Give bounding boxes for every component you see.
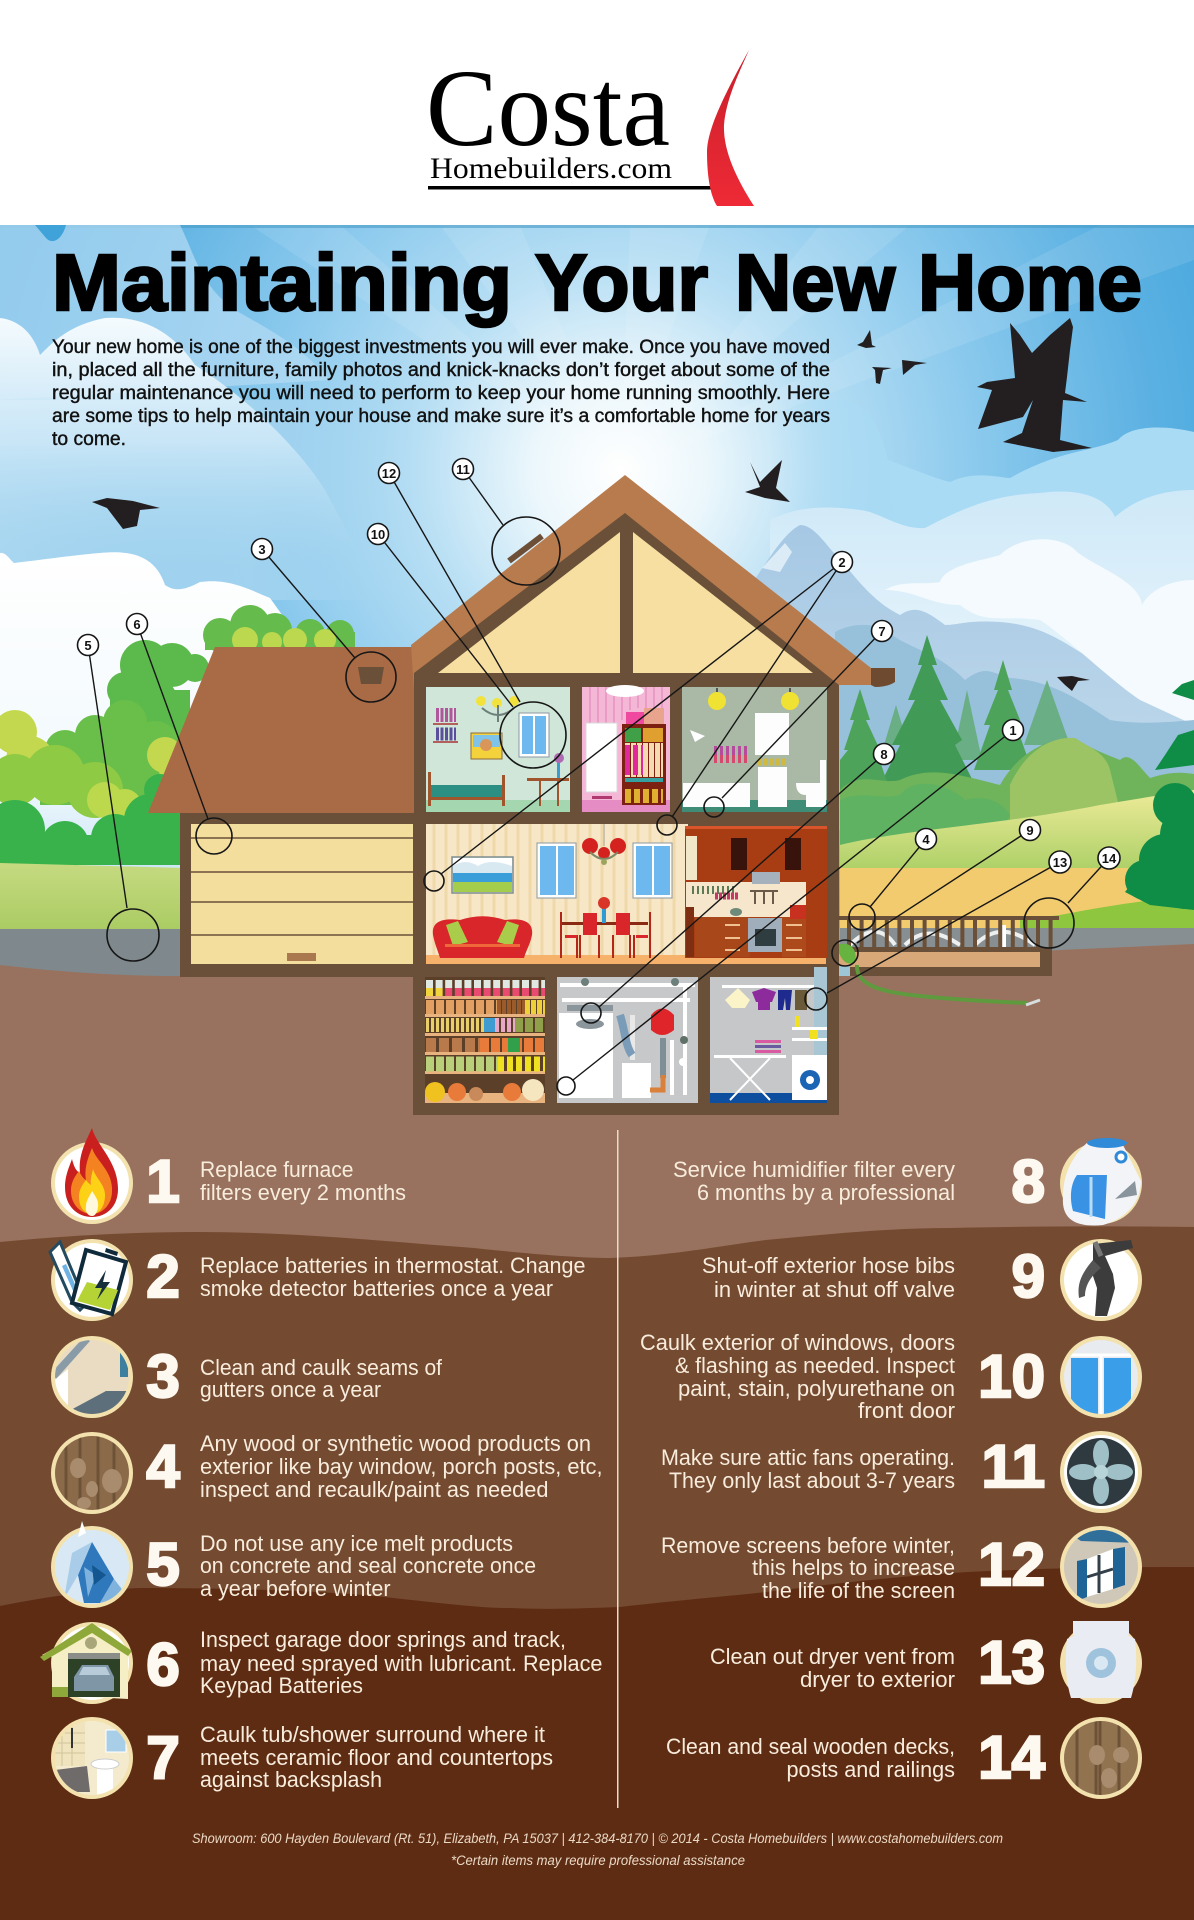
intro paragraph: are some tips to help maintain your house and make sure it’s a comfortable home for years <box>52 406 830 427</box>
house: attic <box>438 532 813 673</box>
callout number badges: 13 <box>1053 855 1067 870</box>
left column tips: on concrete and seal concrete once <box>200 1553 536 1578</box>
sky background <box>0 225 1194 985</box>
soil: middle layer <box>0 1226 1194 1920</box>
right conifer trees <box>840 635 1070 790</box>
right column tips: They only last about 3-7 years <box>669 1468 955 1493</box>
logo: Costa Homebuilders: Costa <box>426 47 670 169</box>
right column tips: dryer to exterior <box>800 1667 955 1692</box>
deck and railing <box>839 916 1059 976</box>
left column tips <box>200 1157 602 1792</box>
item 14: icon wood deck <box>1060 1717 1142 1799</box>
garden hose <box>837 944 1040 1005</box>
item numbers right: 12 <box>978 1531 1045 1598</box>
callout number badges: 9 <box>1026 823 1034 838</box>
right column tips: Clean and seal wooden decks, <box>666 1734 955 1759</box>
item numbers left: 7 <box>146 1724 180 1791</box>
gutter <box>871 668 895 687</box>
item numbers left: 3 <box>146 1343 180 1410</box>
left column tips: filters every 2 months <box>200 1180 406 1205</box>
right column tips: front door <box>858 1398 955 1423</box>
bird: right sky <box>1057 676 1090 691</box>
right column tips: the life of the screen <box>762 1578 955 1603</box>
item numbers left: 5 <box>146 1531 180 1598</box>
item numbers right <box>978 1148 1046 1791</box>
right column tips: Make sure attic fans operating. <box>661 1445 955 1470</box>
left column tips: gutters once a year <box>200 1377 381 1402</box>
title: Home <box>918 238 1142 327</box>
item 7: icon bathroom <box>51 1717 133 1799</box>
left column tips: smoke detector batteries once a year <box>200 1276 553 1301</box>
right road <box>840 928 1194 954</box>
right column tips: paint, stain, polyurethane on <box>678 1376 955 1401</box>
soil: lower layer <box>0 1567 1194 1920</box>
attic fan <box>509 536 542 561</box>
left column tips: Clean and caulk seams of <box>200 1355 443 1380</box>
footer contact and disclaimer: Showroom: 600 Hayden Boulevard (Rt. 51), Elizabeth, PA 15037 | 412-384-8170 | © 2014 - Costa Homebuilders | www.costahomebuilders.com <box>192 1831 1003 1846</box>
callout number badges: 2 <box>838 555 846 570</box>
intro paragraph: Your new home is one of the biggest investments you will ever make. Once you have moved <box>52 337 830 358</box>
item numbers right: 14 <box>978 1724 1046 1791</box>
roof vent <box>358 667 384 684</box>
room: utility / furnace <box>557 977 698 1103</box>
footer contact and disclaimer: *Certain items may require professional assistance <box>451 1853 745 1868</box>
left trees <box>0 640 209 869</box>
intro paragraph: to come. <box>52 429 126 450</box>
bird: left sky <box>92 498 160 529</box>
item 5: icon ice <box>51 1521 133 1608</box>
right tree <box>1125 680 1194 910</box>
item 13: icon dryer <box>1060 1621 1142 1704</box>
left column tips: a year before winter <box>200 1576 390 1601</box>
room: bathroom <box>682 687 827 812</box>
intro paragraph <box>52 337 830 450</box>
item 10: icon window <box>1060 1336 1142 1418</box>
left column tips: Replace batteries in thermostat. Change <box>200 1253 586 1278</box>
callout number badges: 11 <box>456 462 470 477</box>
item 11: icon attic fan <box>1060 1431 1142 1513</box>
callout number badges: 3 <box>258 542 266 557</box>
left column tips: Replace furnace <box>200 1157 354 1182</box>
room: laundry <box>710 967 827 1103</box>
item 12: icon window with shutters <box>1060 1526 1142 1608</box>
callout number badges: 7 <box>878 624 886 639</box>
callout number badges: 8 <box>880 747 888 762</box>
intro paragraph: in, placed all the furniture, family photos and knick-knacks don’t forget about some of the <box>52 360 830 381</box>
left column tips: Caulk tub/shower surround where it <box>200 1722 545 1747</box>
left column tips: may need sprayed with lubricant. Replace <box>200 1651 602 1676</box>
right column tips: posts and railings <box>786 1757 955 1782</box>
callout target circles <box>107 517 1074 1095</box>
title: Your <box>535 238 708 327</box>
logo: Costa Homebuilders <box>426 47 754 206</box>
item 8: icon humidifier <box>1060 1138 1142 1225</box>
item numbers right: 11 <box>982 1433 1045 1500</box>
callout number badges: 1 <box>1009 723 1017 738</box>
right column tips: Remove screens before winter, <box>661 1533 955 1558</box>
left column tips: inspect and recaulk/paint as needed <box>200 1477 548 1502</box>
right column tips: Service humidifier filter every <box>673 1157 955 1182</box>
room: pantry <box>425 977 545 1103</box>
item 2: icon thermostat and battery <box>50 1239 133 1321</box>
bird: above roof <box>745 460 790 502</box>
small birds at top right <box>857 330 927 384</box>
left column tips: exterior like bay window, porch posts, etc, <box>200 1454 602 1479</box>
room: bedroom <box>426 687 570 812</box>
right column tips: Caulk exterior of windows, doors <box>640 1330 955 1355</box>
title <box>52 238 1142 327</box>
callout number badges: 4 <box>922 832 930 847</box>
house: main roof <box>411 475 871 690</box>
callout number badges: 14 <box>1102 851 1117 866</box>
item numbers left <box>146 1148 180 1791</box>
left grass <box>0 863 185 935</box>
intro paragraph: regular maintenance you will need to perform to keep your home running smoothly. Here <box>52 383 830 404</box>
left column tips: Inspect garage door springs and track, <box>200 1627 566 1652</box>
room: living and dining <box>426 824 826 964</box>
item numbers left: 4 <box>146 1433 180 1500</box>
item numbers right: 9 <box>1012 1243 1045 1310</box>
callout leader lines <box>88 469 1109 1080</box>
house: structural frame <box>180 513 839 1115</box>
title: New <box>735 238 896 327</box>
mountains <box>740 525 1194 830</box>
house: garage roof <box>148 647 420 813</box>
soil: upper layer <box>0 944 1194 1920</box>
item 9: icon hose nozzle <box>1060 1239 1142 1321</box>
left column tips: Any wood or synthetic wood products on <box>200 1431 591 1456</box>
item 6: icon garage <box>40 1622 133 1704</box>
item numbers left: 1 <box>146 1148 180 1215</box>
garage door <box>191 824 413 964</box>
item numbers left: 6 <box>146 1631 180 1698</box>
right column tips: & flashing as needed. Inspect <box>675 1353 955 1378</box>
front cloud <box>885 539 1194 725</box>
right column tips: 6 months by a professional <box>697 1180 955 1205</box>
large birds <box>977 318 1092 452</box>
right column tips: Clean out dryer vent from <box>710 1644 955 1669</box>
callout number badges: 12 <box>382 466 396 481</box>
right column tips: this helps to increase <box>752 1555 955 1580</box>
right column tips: in winter at shut off valve <box>714 1277 955 1302</box>
clouds <box>0 225 1194 900</box>
title: Maintaining <box>52 238 512 327</box>
room: kitchen <box>685 826 827 958</box>
item numbers left: 2 <box>146 1243 180 1310</box>
callout number badges: 10 <box>371 527 385 542</box>
right bushes and hills <box>840 738 1194 930</box>
right column tips <box>640 1157 955 1782</box>
callout number badges: 5 <box>84 638 92 653</box>
callout number badges <box>78 458 1120 873</box>
right column tips: Shut-off exterior hose bibs <box>702 1253 955 1278</box>
item 4: icon wood with water drops <box>51 1432 133 1514</box>
left column tips: meets ceramic floor and countertops <box>200 1745 553 1770</box>
callout number badges: 6 <box>133 617 141 632</box>
left column tips: Do not use any ice melt products <box>200 1531 513 1556</box>
distant ridge <box>835 625 1194 830</box>
item numbers right: 10 <box>978 1343 1045 1410</box>
room: closet <box>582 685 670 812</box>
item numbers right: 8 <box>1012 1148 1045 1215</box>
footer contact and disclaimer <box>192 1831 1003 1868</box>
item numbers right: 13 <box>978 1629 1045 1696</box>
left column tips: against backsplash <box>200 1767 382 1792</box>
item 1: icon flame <box>51 1128 133 1224</box>
left road <box>0 929 185 979</box>
left column tips: Keypad Batteries <box>200 1673 363 1698</box>
bushes behind garage roof <box>203 605 355 653</box>
item 3: icon gutter <box>51 1336 133 1418</box>
logo: Costa Homebuilders: Homebuilders.com <box>430 152 672 185</box>
center divider <box>617 1130 618 1808</box>
